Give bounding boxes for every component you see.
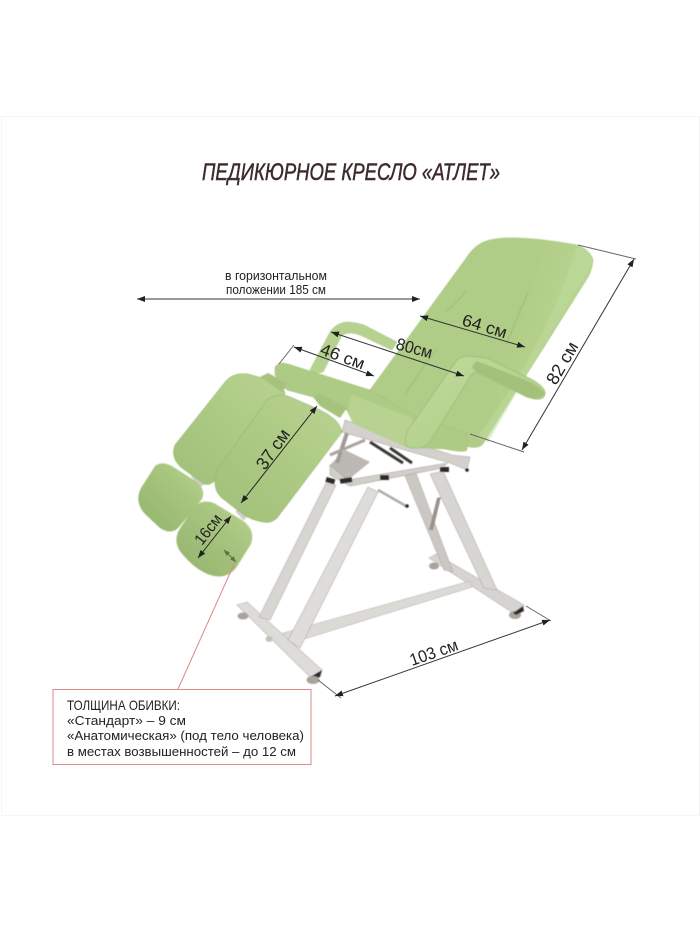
dimension: leg pad 37 cm: 37 см	[252, 425, 294, 473]
dimension: foot pad 16 cm: 16см	[192, 511, 226, 548]
dimension: back width 64 cm	[420, 311, 525, 347]
leg pad connector	[260, 373, 287, 393]
dimension: back width 64 cm: 64 см	[460, 311, 509, 342]
cross tube	[283, 581, 472, 645]
dimension: back height 82 cm: 82 см	[542, 338, 582, 388]
icon: padding thickness arrow	[224, 550, 236, 562]
front base tube	[237, 602, 322, 677]
rear base tube	[429, 554, 524, 613]
dimension: width 80 cm	[331, 332, 464, 376]
callout leader line	[178, 562, 235, 689]
far armrest	[310, 322, 397, 373]
footrest rods	[194, 474, 202, 486]
dimension: back height 82 cm	[470, 245, 636, 452]
seat connector	[313, 393, 347, 418]
dimension: seat depth 46 cm	[279, 340, 374, 376]
callout: upholstery thickness: «Стандарт» – 9 см	[67, 713, 186, 728]
title: ПЕДИКЮРНОЕ КРЕСЛО «АТЛЕТ»	[202, 159, 500, 186]
page panel frame	[2, 116, 700, 816]
rear legs	[405, 473, 453, 572]
backrest	[370, 238, 593, 447]
dimension: width 80 cm: 80см	[394, 335, 435, 362]
mechanism	[342, 420, 470, 470]
dimension: base width 103 cm: 103 см	[407, 636, 461, 670]
left leg pad	[174, 374, 285, 484]
dimension: seat depth 46 cm: 46 см	[318, 340, 367, 373]
callout: upholstery thickness: «Анатомическая» (под тело человека)	[67, 728, 304, 743]
dimension: horizontal length 185 cm: положении 185 см	[226, 283, 326, 297]
right leg pad	[215, 395, 342, 522]
dimension: leg pad 37 cm	[241, 406, 317, 503]
dimension: horizontal length 185 cm: в горизонтальном	[225, 269, 327, 283]
dimension: base width 103 cm	[318, 606, 551, 698]
near armrest	[405, 356, 545, 448]
left foot pad	[138, 463, 203, 532]
callout: upholstery thickness: в местах возвышенностей – до 12 см	[67, 744, 296, 759]
right foot pad	[176, 502, 252, 576]
callout: upholstery thickness: ТОЛЩИНА ОБИВКИ:	[67, 697, 180, 713]
chair illustration	[138, 238, 593, 684]
dimension: horizontal length 185 cm	[137, 269, 420, 299]
callout: upholstery thickness	[53, 690, 311, 764]
front legs	[259, 483, 336, 620]
chair frame	[194, 420, 524, 684]
seat	[275, 363, 467, 451]
